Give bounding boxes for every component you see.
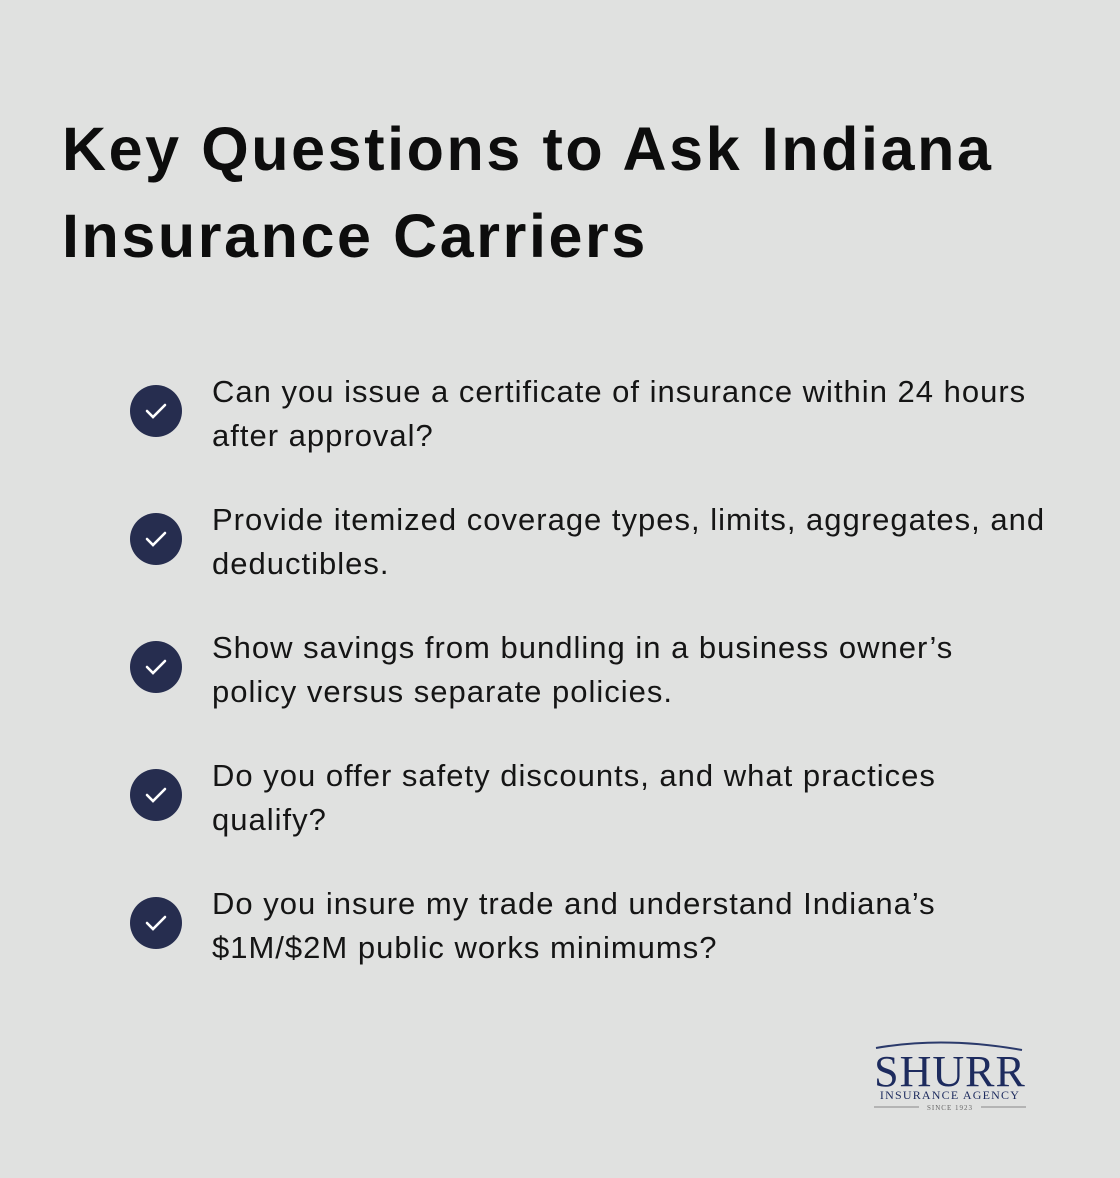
item 3 (130, 630, 953, 709)
text 2: Provide itemized coverage types, limits, aggregates, and (212, 502, 1045, 537)
text 1: after approval? (212, 418, 434, 453)
icon: check (130, 769, 182, 821)
text 4 (212, 758, 936, 837)
item 4 (130, 758, 936, 837)
text 2: deductibles. (212, 546, 389, 581)
text 2 (212, 502, 1045, 581)
text 3: Show savings from bundling in a business owner’s (212, 630, 953, 665)
text 5: Do you insure my trade and understand Indiana’s (212, 886, 936, 921)
title (62, 115, 994, 270)
item 1 (130, 374, 1026, 453)
text 4: Do you offer safety discounts, and what practices (212, 758, 936, 793)
title: Key Questions to Ask Indiana (62, 115, 994, 183)
logo: INSURANCE AGENCY (880, 1088, 1020, 1102)
icon: check (130, 385, 182, 437)
icon: check (130, 513, 182, 565)
text 5: $1M/$2M public works minimums? (212, 930, 717, 965)
text 4: qualify? (212, 802, 327, 837)
text 5 (212, 886, 936, 965)
logo: SHURR (874, 1047, 1026, 1096)
text 3 (212, 630, 953, 709)
title: Insurance Carriers (62, 202, 648, 270)
logo (874, 1042, 1026, 1112)
icon: check (130, 897, 182, 949)
logo: SINCE 1923 (927, 1104, 973, 1112)
text 1: Can you issue a certificate of insurance within 24 hours (212, 374, 1026, 409)
item 5 (130, 886, 936, 965)
item 2 (130, 502, 1045, 581)
icon: check (130, 641, 182, 693)
text 3: policy versus separate policies. (212, 674, 673, 709)
text 1 (212, 374, 1026, 453)
